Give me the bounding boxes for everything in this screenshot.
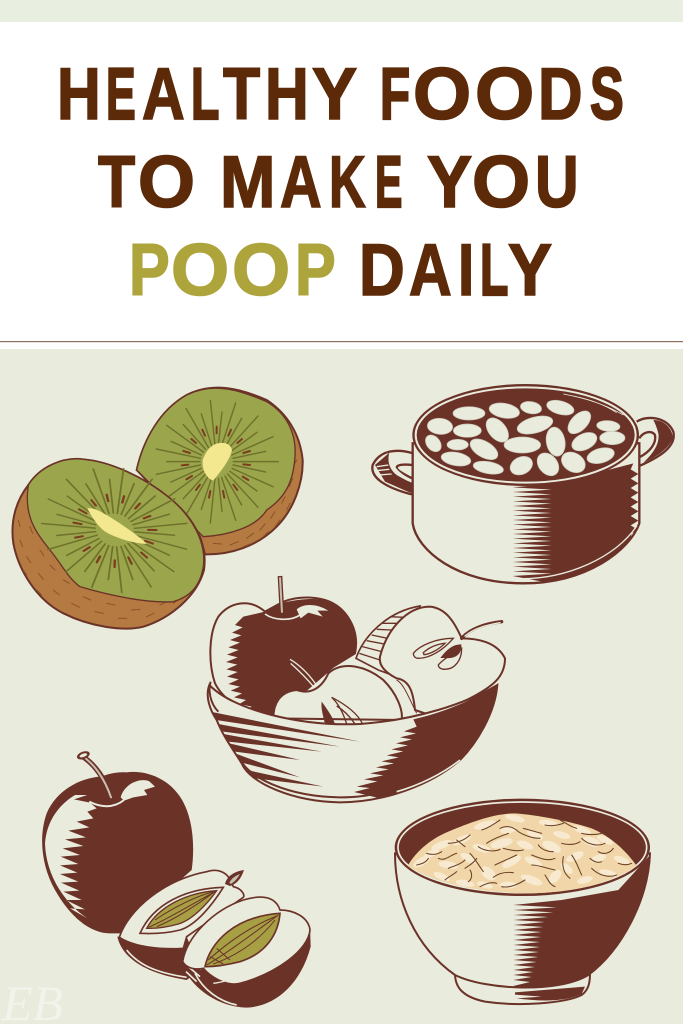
title line 2: T: [98, 142, 136, 223]
title line 3: [129, 230, 552, 311]
oat bowl body: [395, 853, 652, 993]
title line 3: P: [295, 230, 335, 311]
title: [57, 54, 623, 311]
whole apple: [210, 576, 356, 718]
title line 3: O: [232, 230, 291, 311]
title line 1: T: [223, 54, 261, 135]
title line 2: [98, 142, 578, 223]
oats mound: [408, 813, 637, 893]
title line 2: K: [329, 142, 366, 223]
title line 2: M: [220, 142, 276, 223]
title line 2: U: [535, 142, 578, 223]
front kiwi: [12, 452, 205, 629]
illustration: bowl of oats: [395, 799, 652, 1004]
title line 1: A: [142, 54, 184, 135]
title line 2: A: [280, 142, 321, 223]
title line 3: Y: [508, 230, 552, 311]
illustration: pot of beans: [372, 384, 674, 583]
title line 1: [57, 54, 623, 135]
title line 2: Y: [427, 142, 472, 223]
title line 1: D: [538, 54, 582, 135]
title line 3: O: [171, 230, 230, 311]
title line 1: L: [191, 54, 219, 135]
right pot handle: [637, 418, 674, 466]
dark oat creases: [417, 820, 632, 887]
title line 3: L: [480, 230, 508, 311]
title line 3: D: [359, 230, 405, 311]
title line 1: S: [590, 54, 623, 135]
title line 3: P: [129, 230, 169, 311]
light oat flakes: [412, 813, 630, 890]
bowl foot: [455, 973, 590, 1004]
oat bowl rim: [395, 799, 650, 896]
title line 1: Y: [312, 54, 357, 135]
left pot handle: [372, 451, 437, 495]
illustration: kiwi halves: [12, 388, 303, 629]
title line 1: H: [57, 54, 100, 135]
right apple half: [356, 606, 505, 714]
title line 1: E: [106, 54, 135, 135]
bowl: [208, 682, 497, 802]
title line 1: O: [413, 54, 472, 135]
pot body: [413, 443, 639, 583]
title line 1: O: [475, 54, 535, 135]
title line 2: O: [138, 142, 196, 223]
illustration: bowl of apples: [208, 576, 505, 802]
title line 2: E: [375, 142, 402, 223]
pot rim: [412, 384, 639, 486]
top band: [0, 0, 683, 22]
right plum half: [182, 897, 311, 1008]
title line 2: O: [472, 142, 531, 223]
front apple half: [273, 666, 402, 724]
back kiwi: [137, 388, 303, 554]
title line 1: F: [380, 54, 410, 135]
title line 3: I: [458, 230, 474, 311]
title line 3: A: [409, 230, 451, 311]
left plum half: [117, 870, 244, 980]
beans: [422, 398, 625, 480]
illustration: apple and plum halves: [42, 750, 311, 1008]
title line 1: H: [265, 54, 308, 135]
whole dark apple: [42, 750, 193, 933]
title panel: [0, 22, 683, 349]
